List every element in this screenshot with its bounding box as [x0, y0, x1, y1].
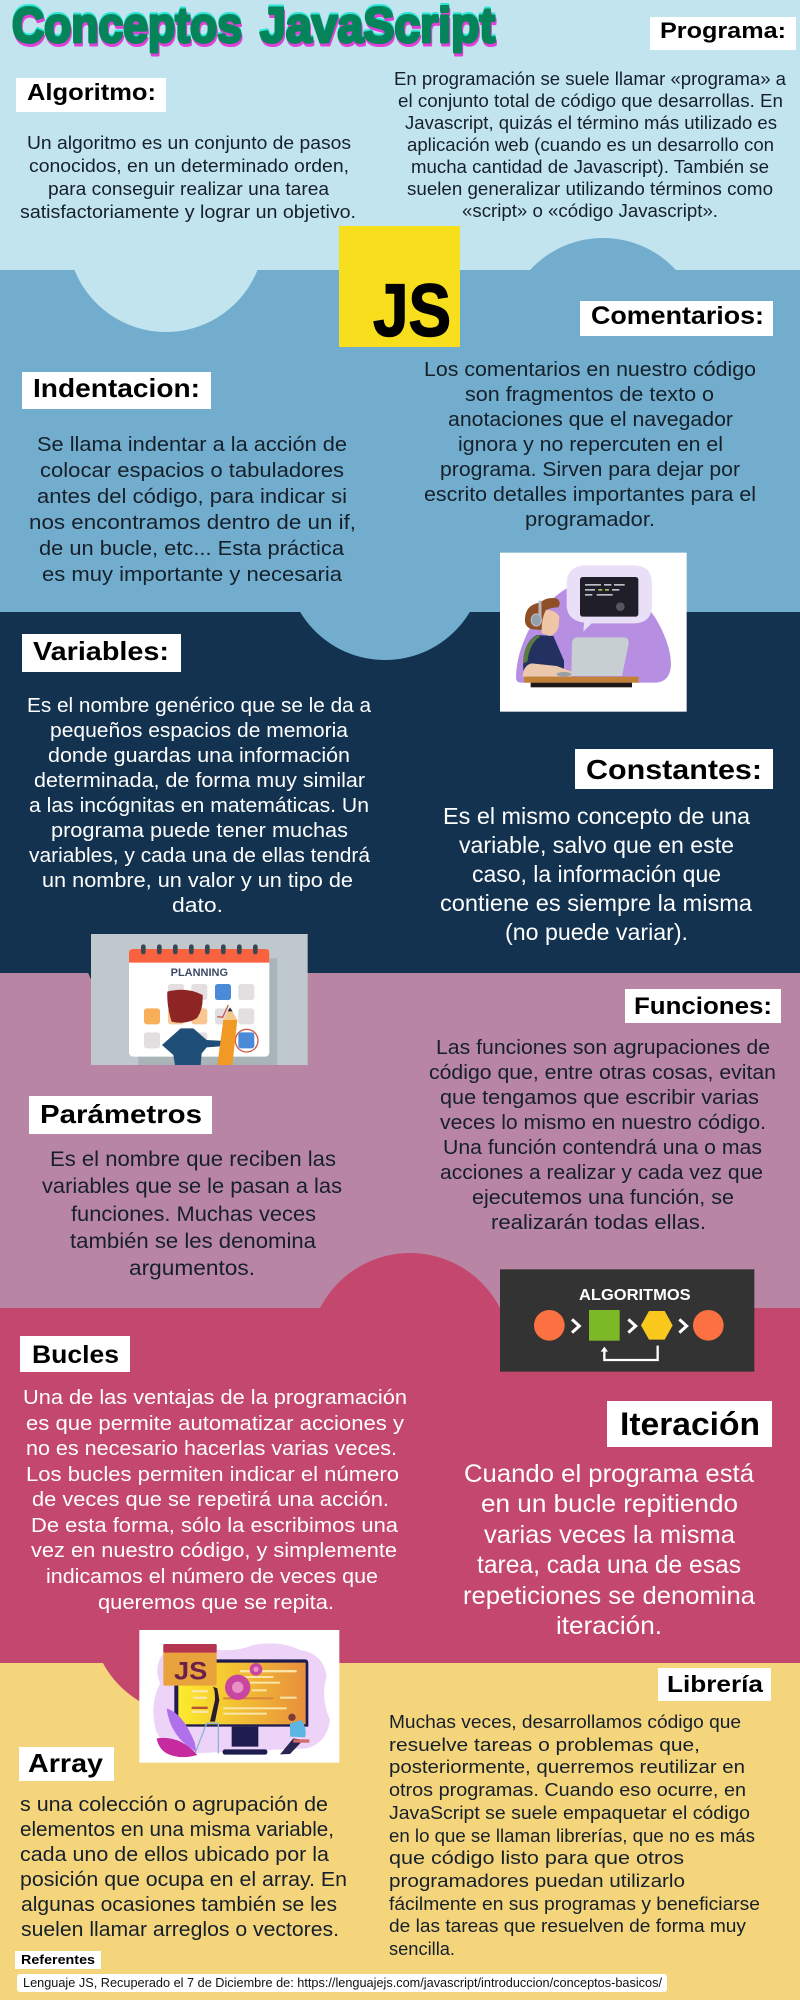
title: JavaScript: [261, 2, 496, 56]
text: comentarios: ignora y no repercuten en el: [458, 434, 723, 456]
text: indentacion: Se llama indentar a la acción de: [37, 434, 347, 456]
illustration: algoritmos flow: [500, 1269, 754, 1372]
text: bucles: Una de las ventajas de la programación: [23, 1387, 407, 1409]
text: indentacion: colocar espacios o tabuladores: [40, 460, 344, 482]
panel: libreria: [389, 1668, 771, 1959]
text: funciones: ejecutemos una función, se: [472, 1187, 734, 1209]
panel: bucles: [20, 1336, 407, 1614]
text: funciones: veces lo mismo en nuestro código.: [440, 1112, 766, 1134]
text: algoritmo: [20, 133, 356, 222]
text: iteracion: iteración.: [556, 1612, 662, 1640]
heading: variables: [22, 634, 181, 672]
text: comentarios: [424, 359, 756, 531]
text: libreria: que código listo para que otros: [389, 1848, 684, 1868]
text: algoritmo: conocidos, en un determinado orden,: [29, 156, 349, 176]
text: libreria: JavaScript se suele empaquetar el código: [389, 1803, 750, 1823]
text: parametros: [42, 1148, 342, 1280]
text: comentarios: son fragmentos de texto o: [465, 384, 714, 406]
text: bucles: [23, 1387, 407, 1614]
panel: variables: [22, 634, 372, 917]
text: funciones: Una función contendrá una o mas: [443, 1137, 762, 1159]
text: array: cada uno de ellos ubicado por la: [20, 1844, 330, 1866]
text: programa: el conjunto total de código que desarrollas. En: [398, 91, 783, 111]
text: variables: determinada, de forma muy similar: [34, 770, 365, 792]
text: variables: a las incógnitas en matemáticas. Un: [29, 795, 369, 817]
text: programa: [394, 69, 787, 221]
text: funciones: acciones a realizar y cada vez que: [440, 1162, 763, 1184]
text: array: algunas ocasiones también se les: [21, 1894, 337, 1916]
panel: constantes: [440, 749, 773, 945]
panel: funciones: [429, 989, 781, 1234]
text: programa: aplicación web (cuando es un desarrollo con: [407, 135, 774, 155]
heading: array: Array: [28, 1748, 104, 1778]
text: indentacion: es muy importante y necesaria: [42, 564, 343, 586]
text: variables: variables, y cada una de ellas tendrá: [29, 845, 371, 867]
text: libreria: de las tareas que resuelven de forma muy: [389, 1916, 746, 1936]
title: Conceptos: [12, 0, 242, 53]
text: parametros: variables que se le pasan a las: [42, 1175, 342, 1198]
heading: indentacion: Indentacion:: [33, 373, 200, 403]
heading: comentarios: Comentarios:: [591, 302, 764, 330]
text: programa: «script» o «código Javascript».: [462, 201, 718, 221]
text: bucles: queremos que se repita.: [98, 1592, 334, 1614]
illustration: planning calendar: PLANNING: [171, 967, 228, 979]
heading: constantes: [575, 749, 773, 789]
text: programa: En programación se suele llamar «programa» a: [394, 69, 787, 89]
text: libreria: Muchas veces, desarrollamos código que: [389, 1712, 741, 1732]
panel: programa: [394, 17, 796, 221]
text: funciones: que tengamos que escribir varias: [440, 1087, 759, 1109]
text: libreria: sencilla.: [389, 1939, 455, 1959]
text: bucles: es que permite automatizar acciones y: [26, 1413, 404, 1435]
text: variables: pequeños espacios de memoria: [50, 720, 349, 742]
text: iteracion: en un bucle repitiendo: [481, 1490, 738, 1518]
text: variables: un nombre, un valor y un tipo de: [42, 870, 353, 892]
text: constantes: Es el mismo concepto de una: [443, 803, 750, 829]
text: comentarios: programa. Sirven para dejar por: [440, 459, 740, 481]
panel: parametros: [29, 1096, 342, 1280]
illustration: developer at laptop: [500, 553, 687, 712]
heading: parametros: [29, 1096, 212, 1134]
text: libreria: resuelve tareas o problemas que,: [389, 1735, 700, 1755]
text: constantes: variable, salvo que en este: [459, 832, 734, 858]
text: iteracion: repeticiones se denomina: [463, 1582, 755, 1610]
text: iteracion: varias veces la misma: [484, 1521, 735, 1549]
text: indentacion: nos encontramos dentro de un if,: [29, 512, 356, 534]
text: variables: dato.: [172, 895, 223, 917]
text: programa: Javascript, quizás el término más utilizado es: [405, 113, 777, 133]
heading: bucles: Bucles: [32, 1341, 119, 1369]
heading: constantes: Constantes:: [586, 754, 762, 785]
icon: JS logo: JS: [373, 269, 451, 352]
title: JavaScript: [260, 0, 495, 53]
references: [15, 1951, 667, 1992]
text: funciones: Las funciones son agrupaciones de: [436, 1037, 770, 1059]
text: funciones: [429, 1037, 776, 1234]
text: constantes: [440, 803, 752, 945]
text: libreria: fácilmente en sus programas y beneficiarse: [389, 1894, 760, 1914]
title: [12, 0, 496, 56]
text: libreria: posteriormente, querremos reutilizar en: [389, 1757, 745, 1777]
text: funciones: código que, entre otras cosas, evitan: [429, 1062, 776, 1084]
text: variables: programa puede tener muchas: [51, 820, 348, 842]
text: constantes: (no puede variar).: [505, 919, 688, 945]
text: comentarios: programador.: [525, 509, 655, 531]
heading: iteracion: [607, 1401, 772, 1447]
text: parametros: Es el nombre que reciben las: [50, 1148, 336, 1171]
text: programa: mucha cantidad de Javascript). También se: [411, 157, 769, 177]
text: funciones: realizarán todas ellas.: [491, 1212, 706, 1234]
text: array: posición que ocupa en el array. En: [20, 1869, 347, 1891]
panel: array: [19, 1747, 347, 1941]
text: algoritmo: Un algoritmo es un conjunto de pasos: [27, 133, 351, 153]
heading: libreria: Librería: [667, 1671, 763, 1697]
text: constantes: contiene es siempre la misma: [440, 890, 752, 916]
text: bucles: no es necesario hacerlas varias veces.: [26, 1438, 397, 1460]
illustration: algoritmos flow: ALGORITMOS: [579, 1287, 691, 1304]
heading: programa: [650, 17, 796, 50]
heading: programa: Programa:: [660, 18, 786, 43]
text: array: suelen llamar arreglos o vectores.: [21, 1919, 339, 1941]
heading: comentarios: [580, 301, 773, 336]
heading: iteracion: Iteración: [620, 1406, 760, 1442]
text: parametros: funciones. Muchas veces: [71, 1203, 316, 1226]
text: array: [20, 1794, 347, 1941]
text: constantes: caso, la información que: [472, 861, 721, 887]
illustration: JS development: JS: [174, 1657, 207, 1685]
text: bucles: Los bucles permiten indicar el número: [26, 1464, 399, 1486]
text: parametros: argumentos.: [129, 1257, 255, 1280]
text: parametros: también se les denomina: [70, 1230, 316, 1253]
text: bucles: de veces que se repetirá una acción.: [32, 1489, 389, 1511]
heading: funciones: [625, 989, 781, 1023]
panel: algoritmo: [16, 78, 356, 222]
heading: funciones: Funciones:: [634, 993, 772, 1020]
text: array: elementos en una misma variable,: [20, 1819, 334, 1841]
text: libreria: en lo que se llaman librerías, que no es más: [389, 1826, 755, 1846]
text: algoritmo: satisfactoriamente y lograr un objetivo.: [20, 202, 356, 222]
citation: Lenguaje JS, Recuperado el 7 de Diciembre de: https://lenguajejs.com/javascript/introduccion/conceptos-basicos/: [23, 1975, 662, 1990]
text: indentacion: antes del código, para indicar si: [37, 486, 347, 508]
title: Conceptos: [13, 2, 243, 56]
text: bucles: vez en nuestro código, y simplemente: [31, 1540, 397, 1562]
text: libreria: programadores puedan utilizarlo: [389, 1871, 685, 1891]
illustration: planning calendar: [91, 934, 308, 1065]
panel: comentarios: [424, 301, 773, 531]
heading: array: [19, 1747, 114, 1781]
text: comentarios: Los comentarios en nuestro código: [424, 359, 756, 381]
heading: variables: Variables:: [33, 636, 169, 666]
heading: indentacion: [22, 372, 211, 409]
heading: algoritmo: Algoritmo:: [27, 79, 156, 105]
heading: parametros: Parámetros: [40, 1099, 202, 1129]
heading: referentes: [15, 1951, 101, 1969]
text: variables: donde guardas una información: [48, 745, 350, 767]
icon: JS logo: [339, 226, 460, 352]
text: iteracion: tarea, cada una de esas: [477, 1551, 741, 1579]
heading: referentes: Referentes: [21, 1952, 95, 1967]
illustration: JS development: [139, 1630, 339, 1763]
text: bucles: indicamos el número de veces que: [46, 1566, 378, 1588]
heading: libreria: [658, 1668, 771, 1701]
text: variables: Es el nombre genérico que se le da a: [27, 695, 372, 717]
heading: bucles: [20, 1336, 130, 1372]
panel: iteracion: [463, 1401, 772, 1640]
text: array: s una colección o agrupación de: [20, 1794, 328, 1816]
text: comentarios: escrito detalles importantes para el: [424, 484, 756, 506]
text: indentacion: de un bucle, etc... Esta práctica: [39, 538, 345, 560]
heading: algoritmo: [16, 78, 166, 112]
text: libreria: [389, 1712, 760, 1959]
text: programa: suelen generalizar utilizando términos como: [407, 179, 773, 199]
text: libreria: otros programas. Cuando eso ocurre, en: [389, 1780, 746, 1800]
text: iteracion: Cuando el programa está: [464, 1460, 754, 1488]
text: indentacion: [29, 434, 356, 586]
text: iteracion: [463, 1460, 755, 1640]
panel: indentacion: [22, 372, 356, 586]
text: variables: [27, 695, 372, 917]
text: bucles: De esta forma, sólo la escribimos una: [31, 1515, 399, 1537]
text: comentarios: anotaciones que el navegador: [448, 409, 733, 431]
text: algoritmo: para conseguir realizar una tarea: [48, 179, 330, 199]
